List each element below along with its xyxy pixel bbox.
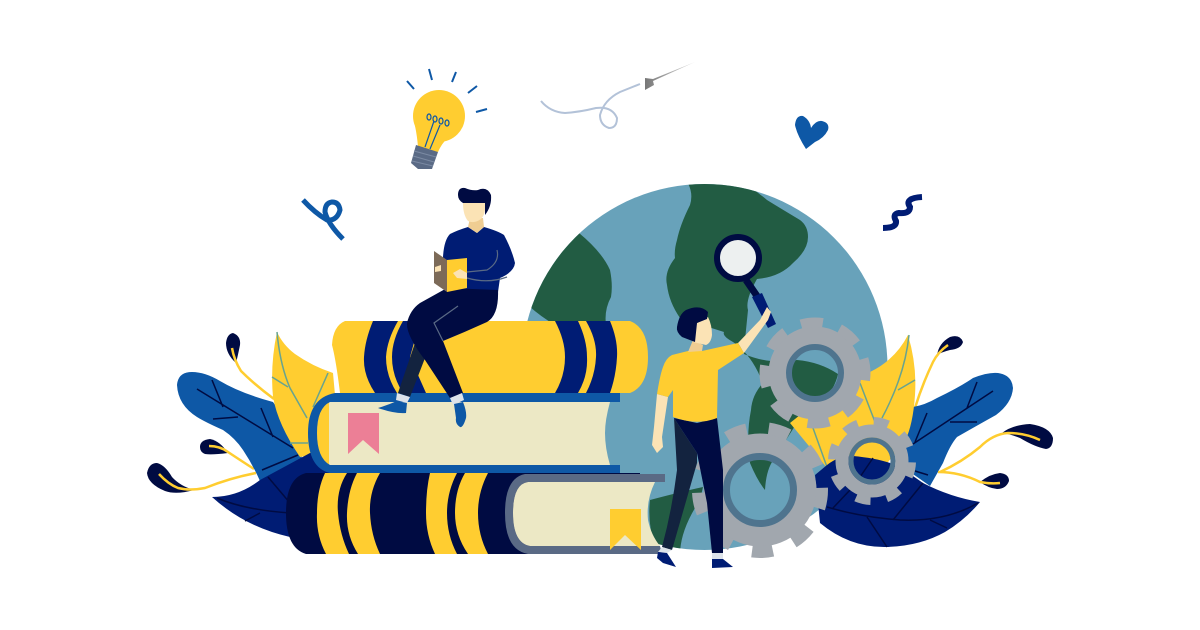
person: holding magnifier [652, 237, 776, 568]
bands [317, 473, 488, 554]
back leg [662, 418, 697, 550]
land: lower continent [649, 487, 703, 555]
socks [658, 547, 723, 559]
neck [468, 218, 484, 233]
leaves: left cluster [147, 332, 345, 540]
person: reading on books [378, 188, 515, 427]
book: bottom, navy with yellow bands [286, 473, 665, 554]
icon: heart [795, 116, 828, 149]
stems and drops: left [147, 333, 274, 493]
gear: upper [752, 310, 878, 436]
leaf: blue left [177, 372, 302, 481]
face [463, 203, 485, 222]
icon: navy wave squiggle [883, 197, 922, 228]
land: main continent [666, 180, 838, 490]
front leg [674, 418, 723, 553]
globe [500, 180, 888, 555]
bookmark: yellow [610, 509, 641, 550]
shoes [378, 401, 466, 427]
icon: light bulb [407, 69, 487, 169]
raised arm [738, 307, 771, 353]
bookmark: pink [348, 413, 379, 454]
book: top, yellow with navy bands [332, 321, 648, 393]
t-shirt [657, 343, 744, 422]
face [693, 317, 712, 345]
leaf: yellow right [790, 335, 915, 472]
sweater [443, 227, 515, 292]
leaf: navy left [212, 453, 345, 540]
illustration: readers, books and globe [147, 63, 1053, 568]
hair [458, 188, 491, 215]
leaf: yellow left [272, 332, 340, 457]
back leg [398, 343, 425, 397]
stems and drops: lower right [938, 424, 1053, 489]
neck [688, 340, 703, 352]
gear: large [696, 426, 824, 554]
book: middle, blue cover [308, 393, 620, 473]
leaf: blue right [900, 373, 1013, 486]
shoes [657, 552, 733, 568]
icon: blue loop squiggle [303, 200, 343, 239]
arm lines [467, 250, 507, 281]
icon: paper plane with trail [541, 62, 695, 128]
bands [364, 321, 426, 393]
left arm [652, 394, 668, 453]
book held [434, 251, 447, 292]
magnifying glass [717, 237, 776, 328]
trousers [407, 288, 498, 398]
hands [435, 265, 467, 279]
stem and drop: top right [915, 336, 963, 408]
hair [677, 307, 708, 342]
leaves: right cluster [790, 335, 1053, 547]
gear: small [831, 420, 913, 502]
leaf: navy right [815, 456, 980, 547]
land: left continent [531, 234, 612, 321]
socks [396, 393, 464, 405]
pages and cover [505, 474, 665, 554]
